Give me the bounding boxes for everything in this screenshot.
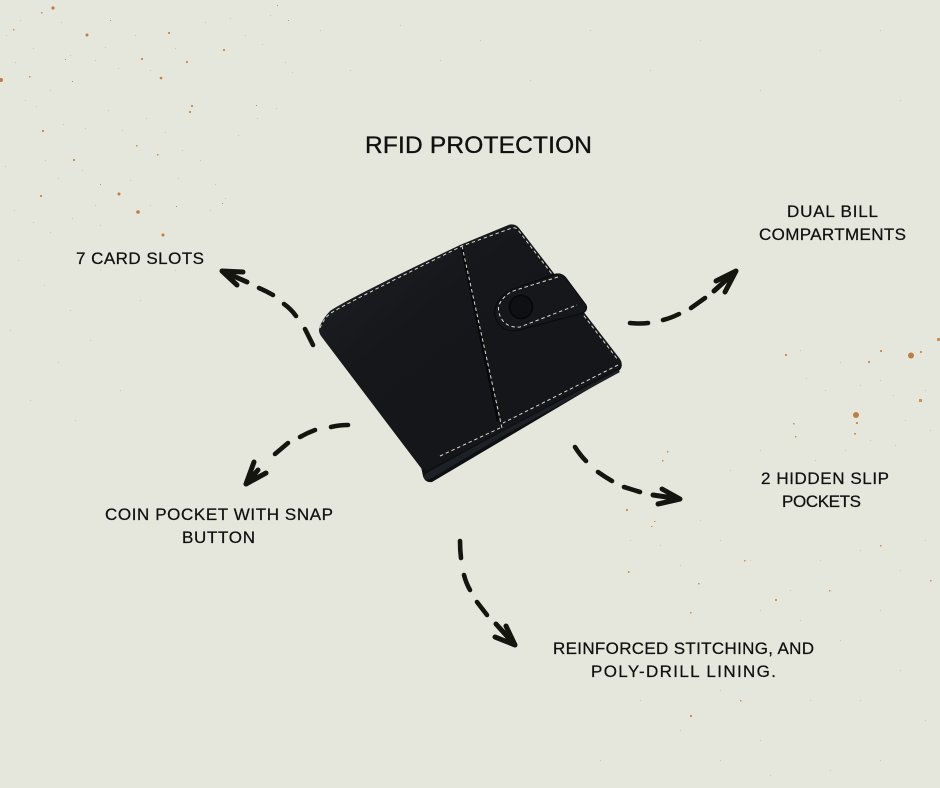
label: dual bill compartments: DUAL BILL xyxy=(787,202,878,221)
wallet: snap strap xyxy=(495,274,587,331)
wallet: lower edge and pages xyxy=(420,362,622,482)
arrow: to 7 card slots xyxy=(222,271,313,345)
label: 2 hidden slip pockets: POCKETS xyxy=(782,492,861,511)
arrow: to slip pockets xyxy=(575,447,680,504)
label: dual bill compartments xyxy=(759,202,906,244)
arrow: to dual bill compartments xyxy=(630,271,736,324)
label: 7 card slots: 7 CARD SLOTS xyxy=(76,249,204,268)
arrow: to reinforced stitching xyxy=(460,541,515,645)
wallet: front leather face xyxy=(319,224,622,471)
title: RFID PROTECTION xyxy=(365,132,592,159)
label: 2 hidden slip pockets: 2 HIDDEN SLIP xyxy=(761,469,889,488)
wallet photo illustration xyxy=(319,224,622,482)
label: 2 hidden slip pockets xyxy=(761,469,889,511)
wallet: snap button xyxy=(510,296,532,318)
label: dual bill compartments: COMPARTMENTS xyxy=(759,225,906,244)
wallet: stitching xyxy=(320,228,618,456)
label: coin pocket with snap button xyxy=(105,505,333,547)
arrow: to coin pocket xyxy=(246,425,348,484)
label: coin pocket with snap button: COIN POCKET WITH SNAP xyxy=(105,505,333,524)
label: coin pocket with snap button: BUTTON xyxy=(182,528,255,547)
label: reinforced stitching and lining: REINFORCED STITCHING, AND xyxy=(553,639,814,658)
wallet: bottom lip shading xyxy=(423,370,620,480)
label: reinforced stitching and lining xyxy=(553,639,814,681)
label: reinforced stitching and lining: POLY-DRILL LINING. xyxy=(591,662,776,681)
wallet: seam groove xyxy=(462,248,498,421)
